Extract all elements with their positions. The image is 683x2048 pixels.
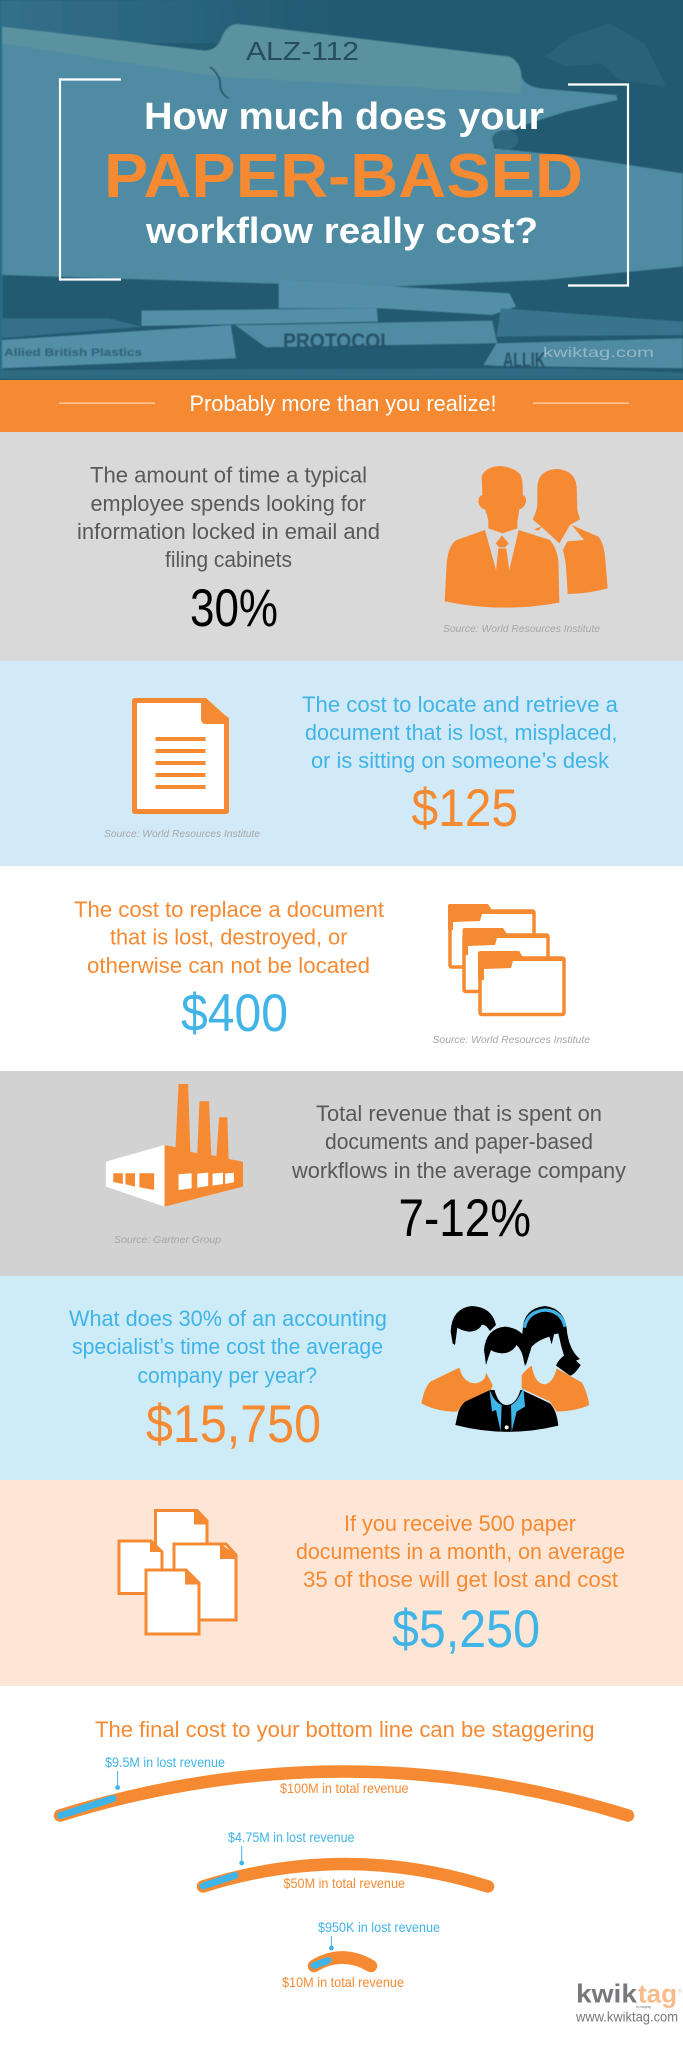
panel: bottom line arcs xyxy=(0,1686,683,2048)
description text xyxy=(291,1101,626,1183)
logo: kwiktag: by imagetag xyxy=(636,2004,651,2009)
hero photo background: file folders: PROTOCOL xyxy=(283,330,392,353)
source note: Source: World Resources Institute xyxy=(443,623,600,635)
right bracket xyxy=(568,84,628,286)
icon: stacked documents xyxy=(119,1509,237,1634)
description text: document that is lost, misplaced, xyxy=(305,720,618,745)
description text xyxy=(74,897,384,978)
panel: 30% time stat xyxy=(0,432,683,661)
heading: The final cost to your bottom line can be staggering xyxy=(95,1717,594,1742)
description text: or is sitting on someone’s desk xyxy=(311,748,610,773)
logo: kwiktag xyxy=(575,1978,682,2025)
chart: $50M arc xyxy=(203,1829,488,1891)
title: workflow really cost? xyxy=(145,210,538,251)
description text: The amount of time a typical xyxy=(90,462,367,488)
panel: subtitle banner xyxy=(0,380,683,432)
chart: $10M arc: $10M in total revenue xyxy=(282,1974,404,1990)
description text: Total revenue that is spent on xyxy=(316,1101,602,1126)
stat 7-12%: 7-12% xyxy=(398,1189,531,1248)
hero photo background: file folders: ALZ-112 xyxy=(246,36,359,66)
stat $400: $400 xyxy=(181,984,288,1043)
chart: $10M arc: $950K in lost revenue xyxy=(318,1919,440,1935)
chart: $100M arc xyxy=(60,1754,628,1816)
panel: $15,750 accounting specialist xyxy=(0,1276,683,1480)
chart: $100M arc: $9.5M in lost revenue xyxy=(105,1754,225,1770)
description text: otherwise can not be located xyxy=(87,953,370,978)
description text: company per year? xyxy=(138,1363,317,1388)
stat 30%: 30% xyxy=(190,579,278,638)
description text: that is lost, destroyed, or xyxy=(110,924,348,950)
subtitle text: Probably more than you realize! xyxy=(190,391,496,416)
description text: If you receive 500 paper xyxy=(344,1511,576,1536)
stat $15,750: $15,750 xyxy=(146,1395,321,1454)
title xyxy=(104,96,583,251)
title: PAPER-BASED xyxy=(104,142,583,211)
source note: Source: World Resources Institute xyxy=(104,828,260,840)
logo: kwiktag: ® xyxy=(678,1988,682,1995)
description text xyxy=(69,1306,387,1388)
description text: information locked in email and xyxy=(77,519,380,544)
source note: Source: World Resources Institute xyxy=(432,1034,590,1046)
description text xyxy=(296,1511,625,1592)
description text: The cost to locate and retrieve a xyxy=(302,692,619,717)
description text: workflows in the average company xyxy=(291,1158,626,1183)
chart: $100M arc: $100M in total revenue xyxy=(280,1780,409,1796)
chart: $50M arc: $50M in total revenue xyxy=(284,1875,405,1891)
icon: document xyxy=(134,698,229,812)
source note: Source: Gartner Group xyxy=(114,1234,221,1246)
chart: $10M arc xyxy=(282,1919,440,1990)
description text: What does 30% of an accounting xyxy=(69,1306,387,1331)
description text: documents in a month, on average xyxy=(296,1539,625,1564)
description text: specialist’s time cost the average xyxy=(72,1334,383,1359)
panel: hero header xyxy=(0,0,683,380)
icon: business people xyxy=(445,466,608,608)
hero photo background: file folders: kwiktag.com xyxy=(543,344,654,360)
panel: $5,250 lost documents xyxy=(0,1480,683,1686)
description text: documents and paper-based xyxy=(325,1129,593,1154)
hero photo background: file folders xyxy=(0,0,683,380)
panel: $125 locate cost xyxy=(0,661,683,866)
hero photo background: file folders: ALLIK xyxy=(503,349,545,372)
logo: kwiktag: kwik xyxy=(576,1978,638,2008)
icon: factory xyxy=(106,1084,243,1207)
description text xyxy=(302,692,619,773)
icon: folders xyxy=(448,904,565,1014)
hero photo background: file folders: Allied British Plastics xyxy=(4,347,142,359)
title: How much does your xyxy=(144,96,544,138)
description text: filing cabinets xyxy=(165,547,292,572)
icon: team of three xyxy=(421,1306,589,1432)
logo: kwiktag: tag xyxy=(638,1978,677,2008)
panel: $400 replace cost xyxy=(0,866,683,1071)
description text: 35 of those will get lost and cost xyxy=(303,1567,618,1592)
stat $5,250: $5,250 xyxy=(392,1600,540,1659)
panel: 7-12% revenue xyxy=(0,1071,683,1276)
stat $125: $125 xyxy=(412,779,518,838)
left bracket xyxy=(60,80,121,280)
chart: $50M arc: $4.75M in lost revenue xyxy=(228,1829,355,1845)
description text: The cost to replace a document xyxy=(74,897,384,922)
description text xyxy=(77,462,380,572)
description text: employee spends looking for xyxy=(90,491,366,516)
